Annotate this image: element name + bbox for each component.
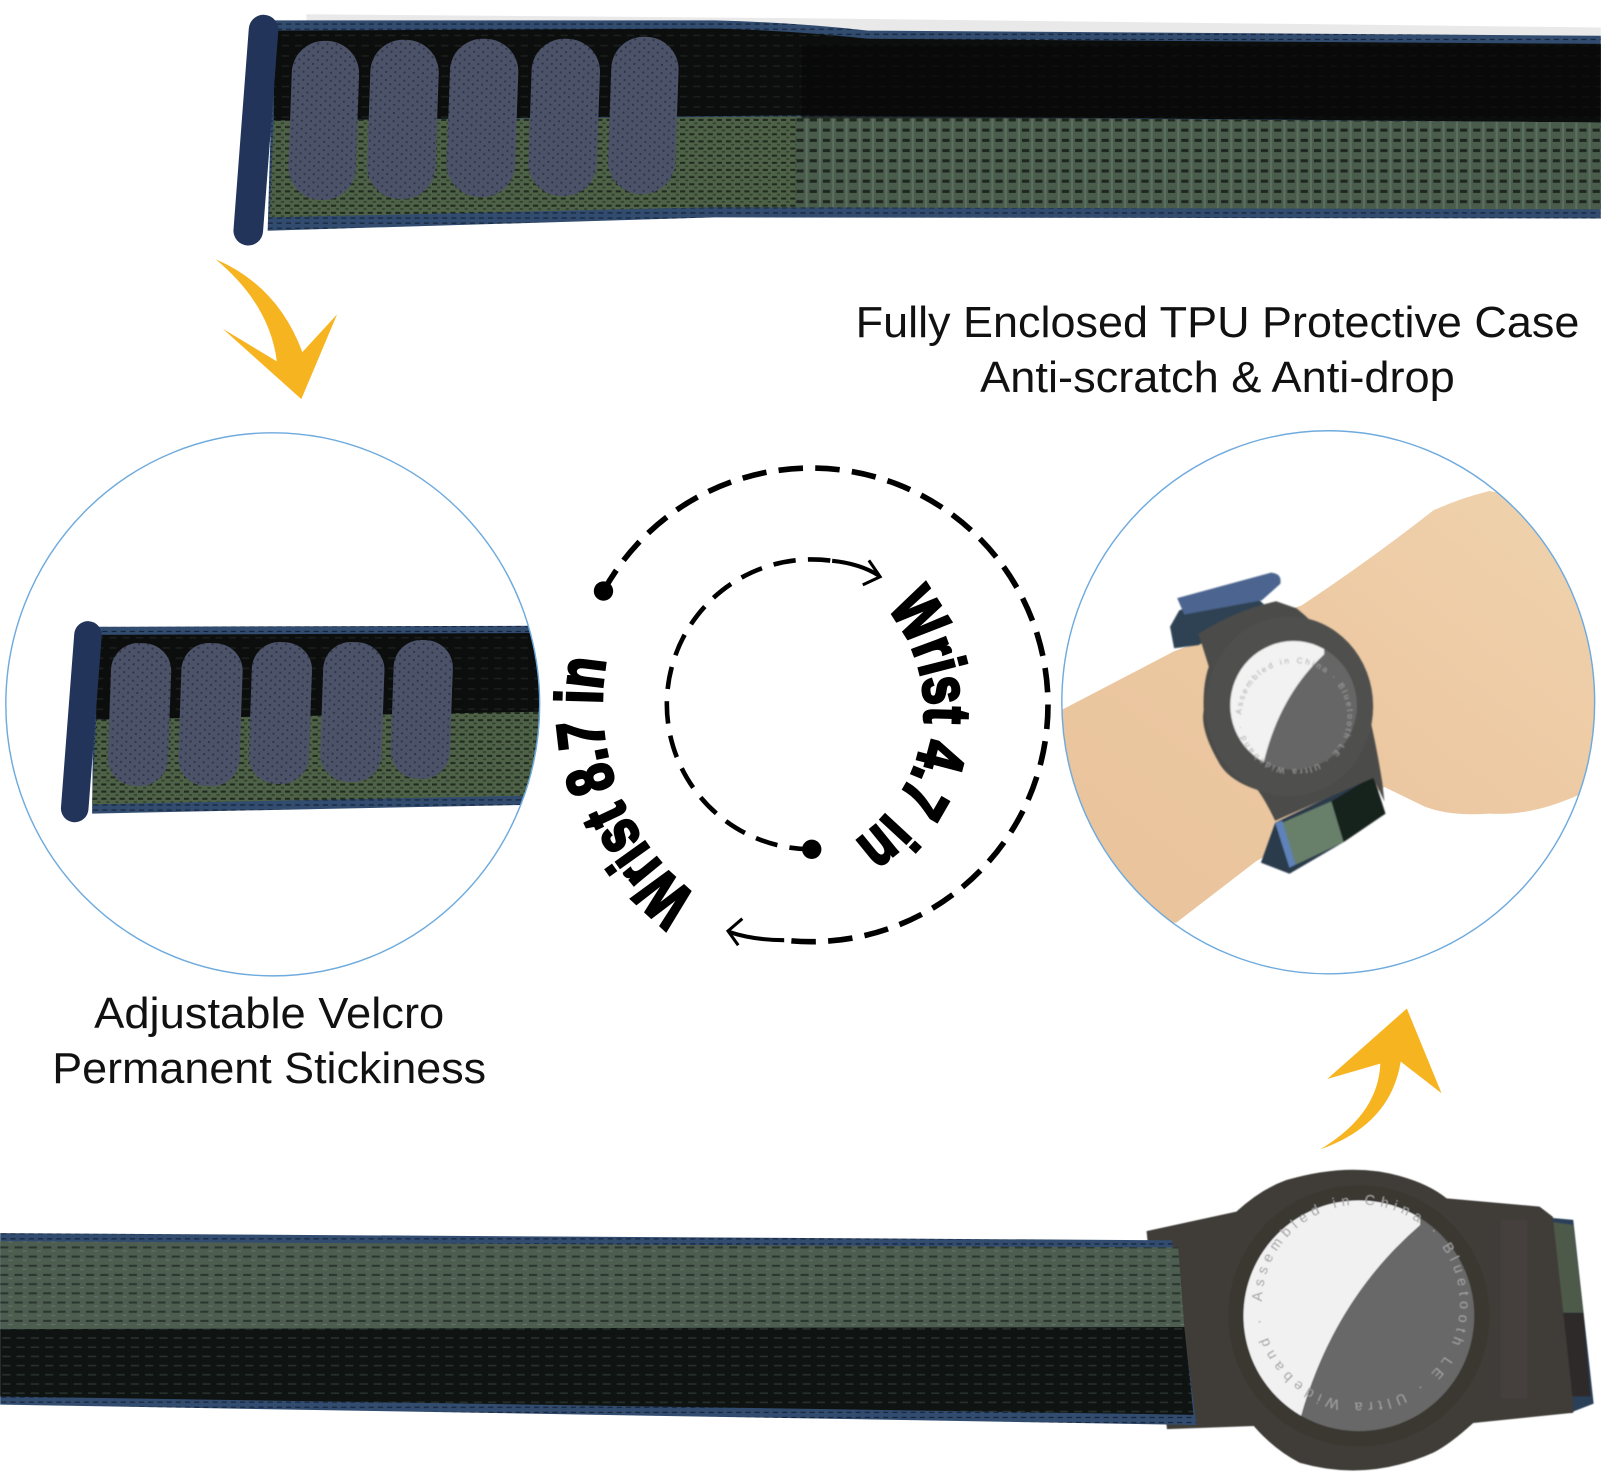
label: wrist 8.7 in: Wrist 8.7 in (552, 658, 692, 933)
panel: wrist photo circle (1061, 430, 1596, 974)
case body (1146, 1168, 1574, 1472)
panel: velcro detail circle (6, 433, 551, 976)
label: fully enclosed case: Anti-scratch & Anti-drop (980, 353, 1455, 402)
label: fully enclosed case (856, 298, 1579, 402)
arrow: yellow down (216, 259, 337, 399)
woven strap (0, 1233, 1197, 1425)
label: wrist 4.7 in: Wrist 4.7 in (855, 580, 969, 866)
label: adjustable velcro (52, 989, 486, 1093)
photo: bottom strap with case (0, 1168, 1594, 1472)
label: adjustable velcro: Adjustable Velcro (94, 989, 444, 1038)
velcro pads (287, 36, 680, 201)
label: fully enclosed case: Fully Enclosed TPU Protective Case (856, 298, 1579, 347)
case body: Assembled in China · Bluetooth LE · Ultra Wideband · (1252, 1194, 1469, 1411)
watch on wrist: Assembled in China · Bluetooth LE · Ultra Wideband · (1236, 657, 1353, 774)
watch on wrist (1169, 572, 1386, 875)
arm (1052, 491, 1601, 923)
strap end (1550, 1218, 1594, 1413)
arrow: outer dashed ring (594, 468, 1048, 945)
arrow: inner dashed ring (667, 559, 880, 859)
arrow: yellow up (1320, 1009, 1442, 1149)
label: adjustable velcro: Permanent Stickiness (52, 1044, 486, 1093)
chart: circular wrist size dial (552, 465, 1051, 946)
photo: top velcro strap (248, 14, 1601, 231)
